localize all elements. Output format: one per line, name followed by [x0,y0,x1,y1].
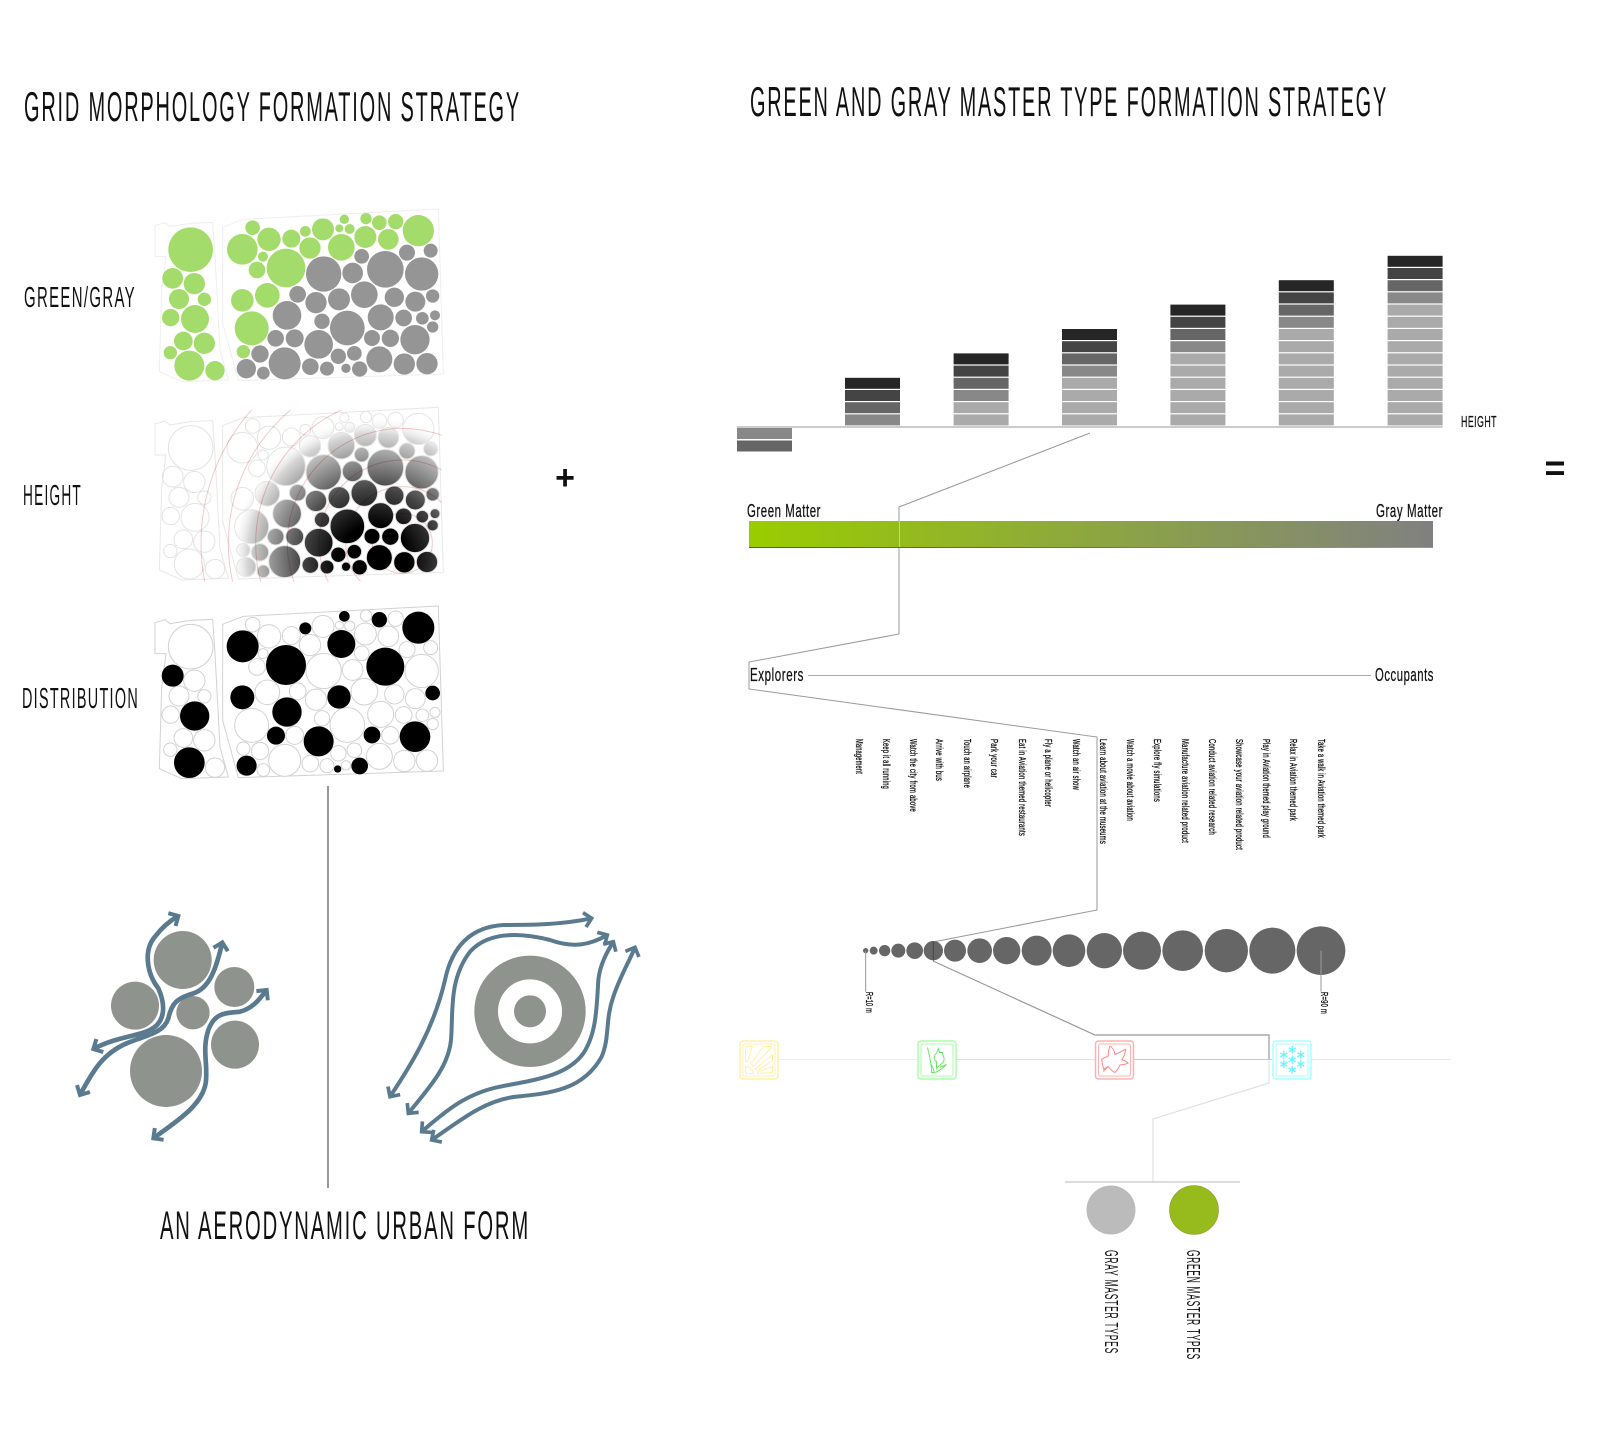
activity list: rotated labels: Touch an airplane [961,739,973,788]
activity list: rotated labels: Explore fly simulations [1151,739,1163,802]
equals sign: = [1544,447,1566,488]
activity list: rotated labels: Management [853,739,865,774]
activity list: rotated labels: Watch a movie about aviation [1124,739,1136,821]
activity list: rotated labels [853,739,1327,850]
activity list: rotated labels: Showcase your aviation related product [1233,739,1245,850]
connector lines [749,433,1269,1182]
map: distribution black circles [155,606,443,779]
label: explorers: Explorers [750,665,804,685]
activity list: rotated labels: Watch the city from above [907,739,919,812]
text: HEIGHT [23,480,82,512]
label: green/gray: GREEN/GRAY [24,282,136,314]
activity list: rotated labels: Park your car [988,739,1000,778]
label: minimum radius: R=10 m [863,992,875,1013]
icon: winter snowflake [1273,1041,1311,1079]
icon: spring sun [740,1041,778,1079]
icon: summer plant [918,1041,956,1079]
radius scale: growing circles [863,926,1345,992]
plus sign: + [555,459,575,497]
activity list: rotated labels: Play in Aviation themed play ground [1260,739,1272,838]
activity list: rotated labels: Relax in Aviation themed park [1287,739,1299,821]
icon: autumn leaf [1096,1041,1134,1079]
vertical connector line [327,786,329,1188]
label: gray matter: Gray Matter [1376,501,1443,521]
gradient bar: green to gray matter [749,521,1433,548]
explorers to occupants line [808,674,1371,676]
label: occupants: Occupants [1375,665,1434,685]
activity list: rotated labels: Fly a plane or helicopter [1042,739,1054,807]
activity list: rotated labels: Eat in Aviation themed restaurants [1016,739,1028,836]
label: height axis: HEIGHT [1461,414,1497,431]
divider above master types [1065,1181,1240,1183]
circle: gray master types [1086,1186,1136,1234]
activity list: rotated labels: Arrive with bus [933,739,945,781]
diagram: airflow around ring form [390,918,635,1140]
diagram: airflow between separate circles [80,916,267,1138]
text: GRID MORPHOLOGY FORMATION STRATEGY [24,83,521,130]
activity list: rotated labels: Manufacture aviation related product [1179,739,1191,843]
activity list: rotated labels: Watch an air show [1070,739,1082,790]
text: DISTRIBUTION [22,683,139,715]
activity list: rotated labels: Learn about aviation at the museums [1097,739,1109,844]
chart: height stacked bars [737,256,1443,452]
activity list: rotated labels: Take a walk in Aviation themed park [1315,739,1327,838]
map: height gradient circles [154,406,444,582]
activity list: rotated labels: Conduct aviation related research [1206,739,1218,835]
season connector lines [778,1058,1451,1060]
activity list: rotated labels: Keep it all running [880,739,892,789]
caption: an aerodynamic urban form: AN AERODYNAMIC URBAN FORM [160,1204,530,1248]
label: maximum radius: R=90 m [1318,992,1330,1014]
circle: green master types [1170,1186,1218,1234]
map: green and gray circles [155,209,443,382]
label: green matter: Green Matter [747,501,821,521]
